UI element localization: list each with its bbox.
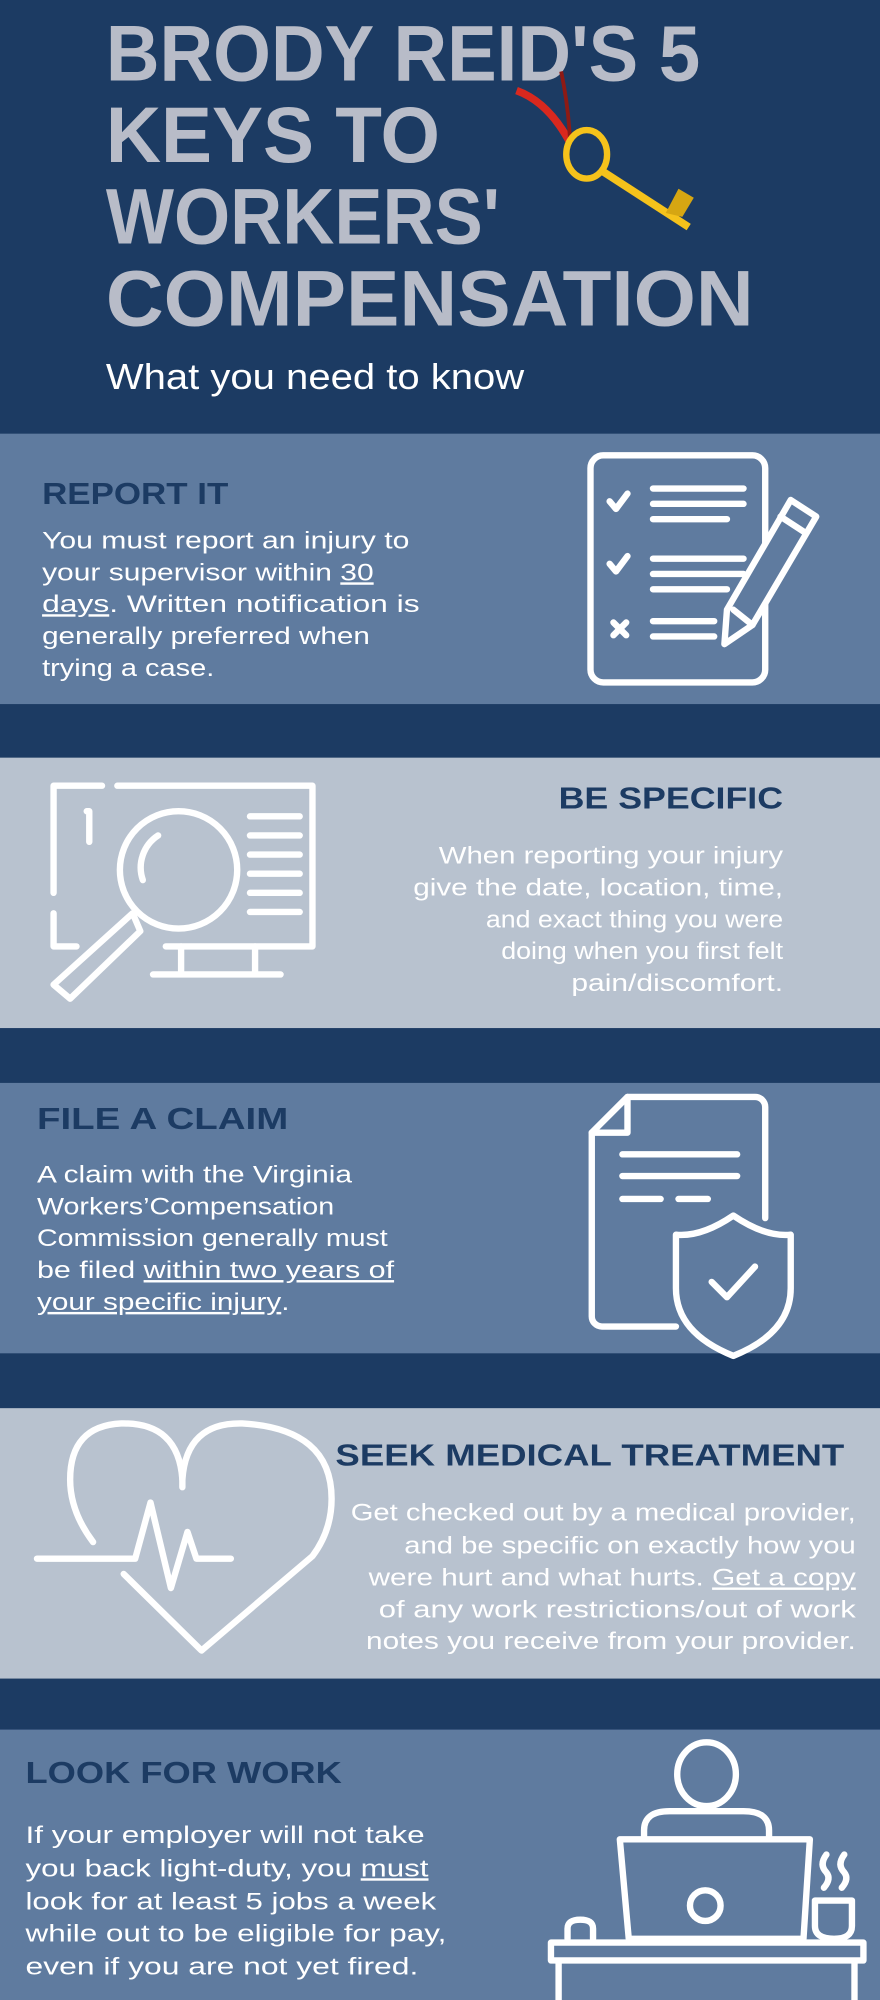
text: report it body: generally preferred when <box>42 623 370 650</box>
heading: look for work: LOOK FOR WORK <box>26 1756 342 1790</box>
icon: heart with heartbeat <box>37 1423 332 1651</box>
text: be specific body: give the date, location, time, <box>413 874 783 901</box>
heading: be specific: BE SPECIFIC <box>559 782 783 816</box>
text: seek medical treatment body <box>351 1499 857 1655</box>
text: file a claim body: be filed within two years of <box>37 1257 394 1284</box>
text: seek medical treatment body: notes you receive from your provider. <box>366 1628 856 1655</box>
text: look for work body: you back light-duty, you must <box>26 1855 429 1882</box>
text: report it body: your supervisor within 30 <box>42 559 374 586</box>
title: COMPENSATION <box>106 253 754 342</box>
panel: seek medical treatment <box>0 1408 880 1679</box>
text: be specific body: and exact thing you were <box>486 906 783 933</box>
heading: seek medical treatment: SEEK MEDICAL TREATMENT <box>335 1439 845 1473</box>
text: look for work body: If your employer will not take <box>26 1822 425 1849</box>
title: KEYS TO <box>106 90 440 179</box>
icon: clipboard with pencil <box>590 455 816 682</box>
text: file a claim body <box>37 1161 394 1316</box>
text: report it body <box>42 527 420 682</box>
panel: be specific <box>0 758 880 1028</box>
text: look for work body: while out to be eligible for pay, <box>24 1920 446 1947</box>
heading: report it: REPORT IT <box>42 477 229 511</box>
text: be specific body: pain/discomfort. <box>571 970 783 997</box>
title <box>106 8 754 342</box>
panel: file a claim <box>0 1083 880 1356</box>
text: seek medical treatment body: Get checked out by a medical provider, <box>351 1499 856 1526</box>
panel: report it <box>0 434 880 704</box>
icon: monitor with magnifier <box>54 786 312 999</box>
text: be specific body: When reporting your injury <box>439 843 784 870</box>
text: seek medical treatment body: and be specific on exactly how you <box>404 1533 856 1560</box>
text: file a claim body: Commission generally must <box>37 1225 388 1252</box>
text: report it body: trying a case. <box>42 655 214 682</box>
text: report it body: You must report an injury to <box>42 527 409 554</box>
text: be specific body <box>413 843 784 997</box>
icon: person at laptop <box>551 1742 863 2000</box>
text: report it body: days . Written notification is <box>42 591 420 618</box>
text: file a claim body: Workers’Compensation <box>37 1193 334 1220</box>
text: file a claim body: your specific injury . <box>37 1289 290 1316</box>
subtitle: What you need to know <box>106 357 524 397</box>
panel: look for work <box>0 1730 880 2000</box>
text: seek medical treatment body: of any work restrictions/out of work <box>379 1596 857 1623</box>
icon: document with shield <box>592 1097 791 1356</box>
text: look for work body <box>24 1822 446 1980</box>
text: look for work body: even if you are not yet fired. <box>26 1953 418 1980</box>
icon: key <box>517 71 694 227</box>
heading: file a claim: FILE A CLAIM <box>37 1102 288 1136</box>
title: BRODY REID'S 5 <box>106 8 700 97</box>
text: seek medical treatment body: were hurt and what hurts. Get a copy <box>367 1564 857 1591</box>
text: look for work body: look for at least 5 jobs a week <box>26 1888 437 1915</box>
text: be specific body: doing when you first felt <box>501 938 783 965</box>
text: file a claim body: A claim with the Virginia <box>37 1161 353 1188</box>
title: WORKERS' <box>106 172 500 261</box>
